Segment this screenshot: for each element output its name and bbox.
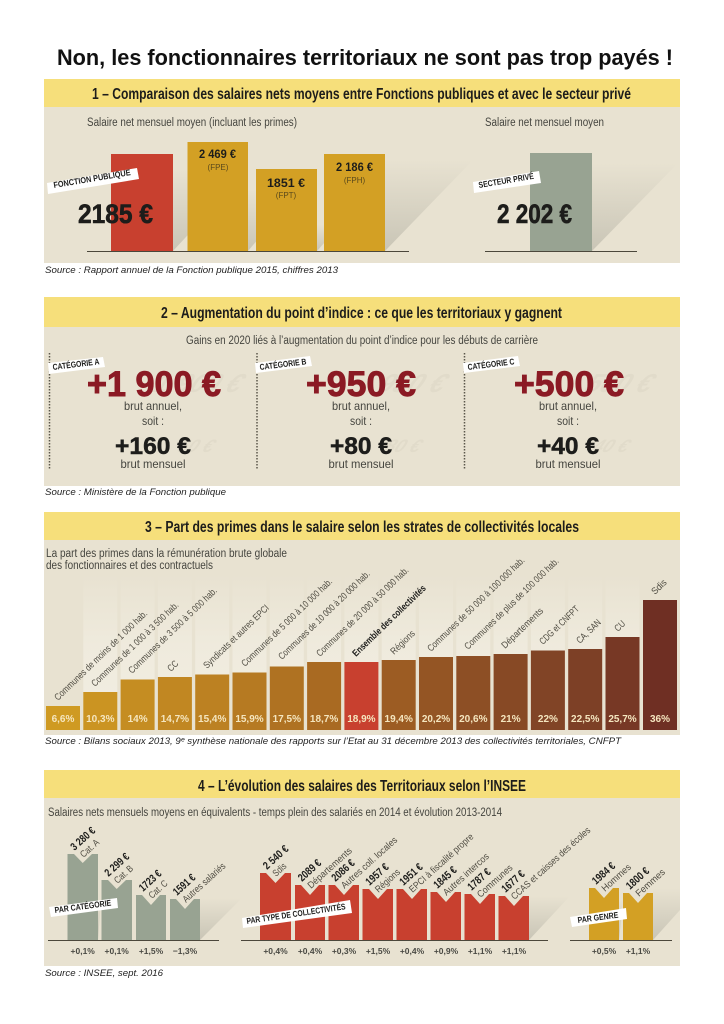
percent changes: +0,5%	[592, 946, 617, 956]
values: 2086 €	[329, 857, 358, 884]
gain B annual: +950 €	[306, 365, 416, 404]
panel 2 heading	[44, 297, 680, 327]
percent changes: +0,9%	[434, 946, 459, 956]
panel 4: INSEE	[44, 770, 680, 966]
bar labels: Communes de 10 000 à 20 000 hab.	[276, 569, 373, 662]
labels: EPCI à fiscalité propre	[407, 832, 476, 895]
bar: FPT: 1851 €	[267, 176, 305, 190]
bar values: 17,5%	[273, 714, 301, 725]
panel 3 heading: 3 – Part des primes dans le salaire selon les strates de collectivités locales	[145, 519, 579, 536]
tag: PAR CATÉGORIE	[54, 898, 112, 915]
bar values: 22,5%	[571, 714, 599, 725]
baselines	[87, 250, 637, 252]
values: 2 299 €	[102, 851, 132, 879]
ghost shadows: 80 €	[379, 437, 428, 456]
bar chart	[46, 600, 677, 730]
labels: Autres salariés	[181, 861, 228, 905]
bar labels	[52, 555, 669, 703]
ghost shadows: 40 €	[587, 437, 636, 456]
bar labels: CU	[612, 619, 628, 634]
bar: FPH	[324, 154, 385, 252]
bar labels: CA, SAN	[574, 617, 604, 646]
bar labels: Ensemble des collectivités	[350, 583, 429, 659]
source 1: Source : Rapport annuel de la Fonction publique 2015, chiffres 2013	[45, 265, 339, 276]
bar labels: Sdis	[649, 577, 669, 597]
panel 4 heading	[44, 770, 680, 798]
values	[590, 860, 652, 892]
panel 4 heading: 4 – L’évolution des salaires des Territoriaux selon l’INSEE	[198, 778, 526, 795]
bar: fonction publique	[111, 154, 173, 252]
panel 1: salary comparison	[44, 79, 680, 263]
tag A: CATÉGORIE A	[52, 356, 100, 372]
panel 3 subtitle	[46, 548, 287, 572]
text C	[539, 399, 597, 428]
values: 1677 €	[499, 868, 528, 895]
tag C: CATÉGORIE C	[467, 356, 515, 372]
bar labels: Communes de 3 500 à 5 000 hab.	[126, 586, 220, 676]
bars	[260, 873, 529, 940]
caption C: brut mensuel	[536, 457, 600, 471]
panel 1 heading	[44, 79, 680, 107]
gain A annual: +1 900 €	[87, 365, 221, 404]
bar values: 14,7%	[161, 714, 189, 725]
labels: Régions	[373, 867, 403, 895]
percent changes: +1,5%	[366, 946, 391, 956]
tag: secteur privé: SECTEUR PRIVÉ	[478, 171, 535, 190]
bar values: 6,6%	[52, 714, 75, 725]
bar: FPE: 2 469 €	[199, 147, 236, 161]
labels: Cat. B	[112, 863, 136, 886]
bar labels: Communes de 1 000 à 3 500 hab.	[89, 600, 181, 689]
bar values: 14%	[128, 714, 148, 725]
percent changes: +1,1%	[626, 946, 651, 956]
chart baselines	[48, 940, 672, 942]
panel 4 subtitle: Salaires nets mensuels moyens en équivalents - temps plein des salariés en 2014 et évolution 2013-2014	[48, 807, 503, 819]
source 4: Source : INSEE, sept. 2016	[45, 968, 164, 979]
ghost shadows: 60 €	[172, 437, 221, 456]
values: 1957 €	[363, 861, 392, 888]
gain A monthly: +160 €	[115, 433, 191, 460]
percent changes	[71, 946, 198, 956]
value: fonction publique: 2185 €	[78, 199, 153, 229]
tag: PAR TYPE DE COLLECTIVITÉS	[246, 901, 346, 926]
bar values: 25,7%	[608, 714, 637, 725]
percent changes	[263, 946, 527, 956]
bar: FPH: 2 186 €	[336, 160, 373, 174]
gain B monthly: +80 €	[330, 433, 392, 460]
ghost shadows: 950 €	[371, 370, 456, 398]
panel 3 subtitle: des fonctionnaires et des contractuels	[46, 560, 213, 572]
bar labels: Régions	[388, 628, 418, 657]
caption B: brut mensuel	[328, 457, 394, 471]
column: catégorie C	[463, 356, 624, 471]
labels: CCAS et caisses des écoles	[509, 825, 593, 902]
chart: par type de collectivités	[242, 825, 593, 956]
bar values: 18,9%	[347, 714, 376, 725]
bar labels: Départements	[499, 606, 546, 651]
labels: Autres coll. locales	[339, 835, 400, 891]
private sector subtitle: Salaire net mensuel moyen	[485, 117, 604, 129]
panel 2 subtitle: Gains en 2020 liés à l’augmentation du point d’indice pour les débuts de carrière	[186, 335, 538, 347]
bar values: 19,4%	[385, 714, 413, 725]
bar values	[52, 714, 670, 725]
chart shadows	[98, 888, 680, 940]
bar values: 20,2%	[422, 714, 450, 725]
tag B: CATÉGORIE B	[259, 356, 307, 372]
public sector subtitle: Salaire net mensuel moyen (incluant les primes)	[87, 117, 297, 129]
labels: Cat. A	[78, 837, 102, 860]
text C: brut annuel,	[539, 399, 597, 413]
bar: FPT	[256, 169, 317, 252]
tag: secteur privé	[473, 171, 541, 193]
values: 1845 €	[431, 864, 460, 891]
gain C monthly: +40 €	[537, 433, 599, 460]
bars	[68, 854, 200, 940]
gain C annual: +500 €	[514, 365, 624, 404]
bar values: 18,7%	[310, 714, 338, 725]
ghost shadows: 500 €	[578, 370, 663, 398]
values: 2 540 €	[261, 843, 291, 872]
chart: par genre	[570, 860, 668, 956]
dotted separators	[50, 353, 464, 470]
tag: fonction publique: FONCTION PUBLIQUE	[53, 167, 132, 190]
percent changes: +1,5%	[139, 946, 164, 956]
bar: FPT: (FPT)	[276, 191, 297, 200]
chart: par catégorie	[49, 825, 228, 956]
text A: brut annuel,	[124, 399, 182, 413]
bar values: 36%	[650, 714, 670, 725]
bar labels: Syndicats et autres EPCI	[201, 603, 272, 671]
bar labels: Communes de 20 000 à 50 000 hab.	[314, 565, 411, 659]
values	[68, 825, 198, 898]
bar: FPE	[188, 142, 248, 252]
text B: soit :	[350, 414, 372, 428]
bar shadows	[173, 160, 678, 251]
labels	[78, 837, 228, 905]
bar values: 15,4%	[198, 714, 226, 725]
values: 1591 €	[171, 872, 198, 898]
bars	[589, 888, 653, 940]
panel 2 heading: 2 – Augmentation du point d’indice : ce que les territoriaux y gagnent	[161, 305, 562, 322]
bar labels: Communes de moins de 1 000 hab.	[52, 608, 150, 703]
values: 1800 €	[624, 865, 652, 892]
column: catégorie B	[255, 356, 416, 471]
bar: secteur privé	[530, 153, 592, 252]
percent changes: +0,1%	[71, 946, 95, 956]
bar values: 20,6%	[459, 714, 488, 725]
bar labels: Communes de 5 000 à 10 000 hab.	[239, 576, 335, 669]
panel 3 heading	[44, 512, 680, 540]
source 3: Source : Bilans sociaux 2013, 9ᵉ synthèse nationale des rapports sur l’Etat au 31 décembre 2013 des collectivités territoriales, CNFPT	[45, 736, 622, 747]
values	[261, 843, 528, 895]
bar labels: CC	[165, 659, 181, 674]
labels	[271, 825, 593, 902]
labels: Hommes	[600, 862, 634, 894]
values: 1723 €	[137, 868, 164, 894]
bar values: 15,9%	[235, 714, 264, 725]
text B	[332, 399, 390, 428]
text B: brut annuel,	[332, 399, 390, 413]
bar labels: CDG et CNFPT	[537, 604, 582, 647]
ghost shadows: 1 900 €	[146, 370, 252, 398]
text C: soit :	[557, 414, 579, 428]
labels: Communes	[475, 862, 515, 900]
tag: PAR GENRE	[577, 910, 619, 925]
panel 2: point d'indice	[44, 297, 680, 486]
caption A: brut mensuel	[120, 457, 186, 471]
text A	[124, 399, 182, 428]
percent changes: +0,4%	[298, 946, 323, 956]
labels: Autres intercos	[441, 851, 492, 898]
bar values: 10,3%	[86, 714, 115, 725]
values: 1951 €	[397, 861, 426, 888]
column glow	[83, 575, 640, 730]
values: 2089 €	[296, 857, 324, 884]
labels: Cat. C	[147, 878, 170, 901]
values: 3 280 €	[68, 825, 98, 853]
percent changes: +0,4%	[400, 946, 425, 956]
bar labels: Communes de plus de 100 000 hab.	[462, 556, 561, 652]
labels: Femmes	[634, 867, 668, 899]
title: Non, les fonctionnaires territoriaux ne sont pas trop payés !	[57, 45, 673, 70]
text A: soit :	[142, 414, 164, 428]
percent changes	[592, 946, 651, 956]
percent changes: −1,3%	[173, 946, 198, 956]
labels	[600, 862, 668, 899]
values: 1984 €	[590, 860, 618, 887]
values: 1787 €	[465, 866, 494, 893]
bar values: 22%	[538, 714, 558, 725]
panel 3 subtitle: La part des primes dans la rémunération brute globale	[46, 548, 287, 560]
percent changes: +0,3%	[332, 946, 357, 956]
labels: Départements	[306, 845, 355, 891]
bar: FPE: (FPE)	[208, 163, 229, 172]
value: secteur privé: 2 202 €	[497, 199, 572, 229]
percent changes: +0,4%	[263, 946, 288, 956]
labels: Sdis	[271, 861, 289, 879]
ghost shadows	[146, 370, 663, 456]
source 2: Source : Ministère de la Fonction publique	[45, 487, 226, 498]
panel 3: primes	[44, 512, 680, 735]
bar values: 21%	[501, 714, 521, 725]
bar labels: Communes de 50 000 à 100 000 hab.	[425, 555, 527, 654]
bar: FPH: (FPH)	[344, 176, 366, 185]
percent changes: +1,1%	[502, 946, 527, 956]
percent changes: +1,1%	[468, 946, 493, 956]
column: catégorie A	[48, 356, 221, 471]
percent changes: +0,1%	[105, 946, 129, 956]
